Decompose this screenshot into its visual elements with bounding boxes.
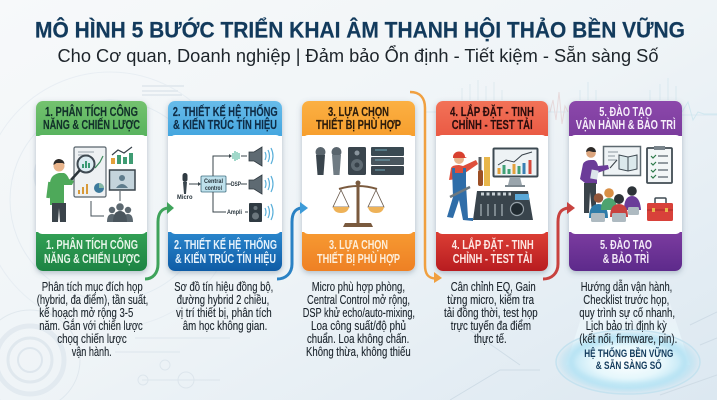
heading: step 1: NĂNG & CHIẾN LƯỢC: [43, 117, 140, 132]
text block: step 1: vận hành.: [72, 344, 112, 359]
footer: step 3: THIẾT BỊ PHÙ HỢP: [317, 251, 400, 266]
callout: sustainable system: HỆ THỐNG BỀN VỮNG: [584, 346, 673, 360]
icon: students: [589, 186, 641, 222]
icon: toolbox: [647, 198, 673, 221]
chart: signal flow diagram: DSP: [231, 182, 241, 188]
text block: step 3: Central Control mở rộng,: [307, 292, 410, 307]
text block: step 2: [174, 279, 273, 333]
chart: signal flow diagram: control: [205, 186, 222, 192]
text block: step 3: [303, 279, 415, 359]
callout: sustainable system: & SẴN SÀNG SỐ: [596, 358, 662, 372]
heading: step 3: THIẾT BỊ PHÙ HỢP: [316, 117, 401, 132]
heading: step 2: [173, 104, 278, 132]
text block: step 2: âm học không gian.: [183, 318, 267, 333]
footer: step 3: 3. LỰA CHỌN: [329, 238, 388, 252]
heading: step 4: [450, 104, 534, 132]
text block: step 5: [579, 279, 677, 346]
text block: step 4: thực tế.: [474, 331, 507, 346]
subtitle: Cho Cơ quan, Doanh nghiệp | Đảm bảo Ổn định - Tiết kiệm - Sẵn sàng Số: [58, 45, 658, 66]
callout: sustainable system: [584, 346, 673, 372]
text block: step 3: Không thừa, không thiếu: [306, 344, 411, 359]
text block: step 1: năm. Gắn với chiến lược: [39, 318, 143, 333]
chart: signal flow diagram: Central: [204, 179, 223, 185]
panel: step 1: [36, 101, 147, 271]
footer: step 3: [317, 238, 400, 266]
text block: step 1: chọq chiến lược: [57, 331, 127, 346]
chart: signal flow diagram: Ampli: [227, 210, 242, 216]
panel: step 4: [436, 101, 548, 271]
icon: technician: [447, 152, 490, 221]
arrow: step 1 to step 2: [145, 202, 174, 279]
heading: step 2: 2. THIẾT KẾ HỆ THỐNG: [173, 104, 278, 119]
text block: step 2: vị trí thiết bị, phân tích: [176, 305, 272, 320]
text block: step 5: Checklist trước họp,: [583, 292, 669, 307]
icon: checklist: [647, 146, 672, 183]
glow platform: [450, 275, 717, 400]
heading: step 5: VẬN HÀNH & BẢO TRÌ: [576, 117, 676, 132]
text block: step 3: Micro phù hợp phòng,: [312, 279, 405, 294]
footer: step 1: 1. PHÂN TÍCH CÔNG: [46, 237, 138, 252]
heading: step 3: [316, 105, 401, 132]
text block: step 5: Lịch bảo trì định kỳ: [586, 318, 667, 333]
footer: step 2: [174, 237, 277, 266]
heading: step 1: 1. PHÂN TÍCH CÔNG: [45, 104, 138, 119]
icon: microphones and rack: [316, 147, 404, 175]
text block: step 1: kế hoạch mở rộng 3-5: [39, 305, 133, 320]
heading: step 1: [43, 104, 140, 132]
footer: step 5: 5. ĐÀO TẠO: [600, 237, 652, 252]
heading: step 5: [576, 104, 676, 132]
arrow: step 3 to step 4: [410, 92, 442, 283]
text block: step 1: Phân tích mục đích họp: [42, 279, 143, 294]
text block: step 1: [37, 279, 148, 359]
panel: step 3: [302, 101, 415, 271]
text block: step 3: chuẩn. Loa không chấn.: [307, 331, 409, 346]
arrow: step 4 to step 5: [543, 202, 575, 279]
text block: step 2: Sơ đồ tín hiệu đồng bộ,: [174, 279, 273, 294]
icon: monitor: [494, 148, 538, 187]
icon: balance scale: [333, 180, 384, 227]
text block: step 2: đường hybrid 2 chiều,: [177, 292, 269, 307]
panel: step 5: [569, 101, 682, 271]
heading: step 3: 3. LỰA CHỌN: [328, 105, 389, 119]
text block: step 5: (kết nối, firmware, pin).: [579, 331, 677, 346]
chart: signal flow diagram: [177, 147, 273, 222]
footer: step 2: & KIẾN TRÚC TÍN HIỆU: [175, 251, 276, 266]
text block: step 1: (hybrid, đa điểm), tần suất,: [37, 292, 148, 307]
arrow: step 2 to step 3: [277, 202, 308, 279]
footer: step 4: [452, 237, 534, 266]
text block: step 4: trực tuyến đa điểm: [451, 318, 531, 333]
footer: step 5: [600, 237, 652, 266]
chart: signal flow diagram: Micro: [177, 195, 193, 201]
heading: step 5: 5. ĐÀO TẠO: [599, 104, 652, 119]
title: MÔ HÌNH 5 BƯỚC TRIỂN KHAI ÂM THANH HỘI THẢO BỀN VỮNG: [35, 18, 685, 42]
footer: step 1: NĂNG & CHIẾN LƯỢC: [44, 251, 140, 266]
text block: step 3: Loa công suất/độ phủ: [311, 318, 406, 333]
text block: step 4: [444, 279, 538, 346]
footer: step 2: 2. THIẾT KẾ HỆ THỐNG: [174, 237, 277, 252]
icon: trainer at board: [580, 146, 640, 213]
footer: step 1: [44, 237, 140, 266]
footer: step 5: & BẢO TRÌ: [603, 251, 649, 266]
text block: step 4: từng micro, kiểm tra: [447, 292, 535, 307]
icon: mixing console: [473, 191, 533, 220]
text block: step 4: Cân chỉnh EQ, Gain: [451, 279, 536, 294]
heading: step 4: CHỈNH - TEST TẢI: [452, 117, 533, 132]
text block: step 3: DSP khử echo/auto-mixing,: [303, 305, 415, 320]
text block: step 5: Hướng dẫn vận hành,: [581, 279, 672, 294]
footer: step 4: 4. LẮP ĐẶT - TINH: [452, 237, 534, 252]
footer: step 4: CHỈNH - TEST TẢI: [453, 251, 532, 266]
text block: step 4: tải đồng thời, test họp: [444, 305, 538, 320]
heading: step 2: & KIẾN TRÚC TÍN HIỆU: [173, 117, 277, 132]
panel: step 2: [168, 101, 282, 271]
icon: analyst with charts: [48, 147, 135, 222]
text block: step 5: quy trình sự cố nhanh,: [579, 305, 675, 320]
heading: step 4: 4. LẮP ĐẶT - TINH: [450, 104, 534, 119]
